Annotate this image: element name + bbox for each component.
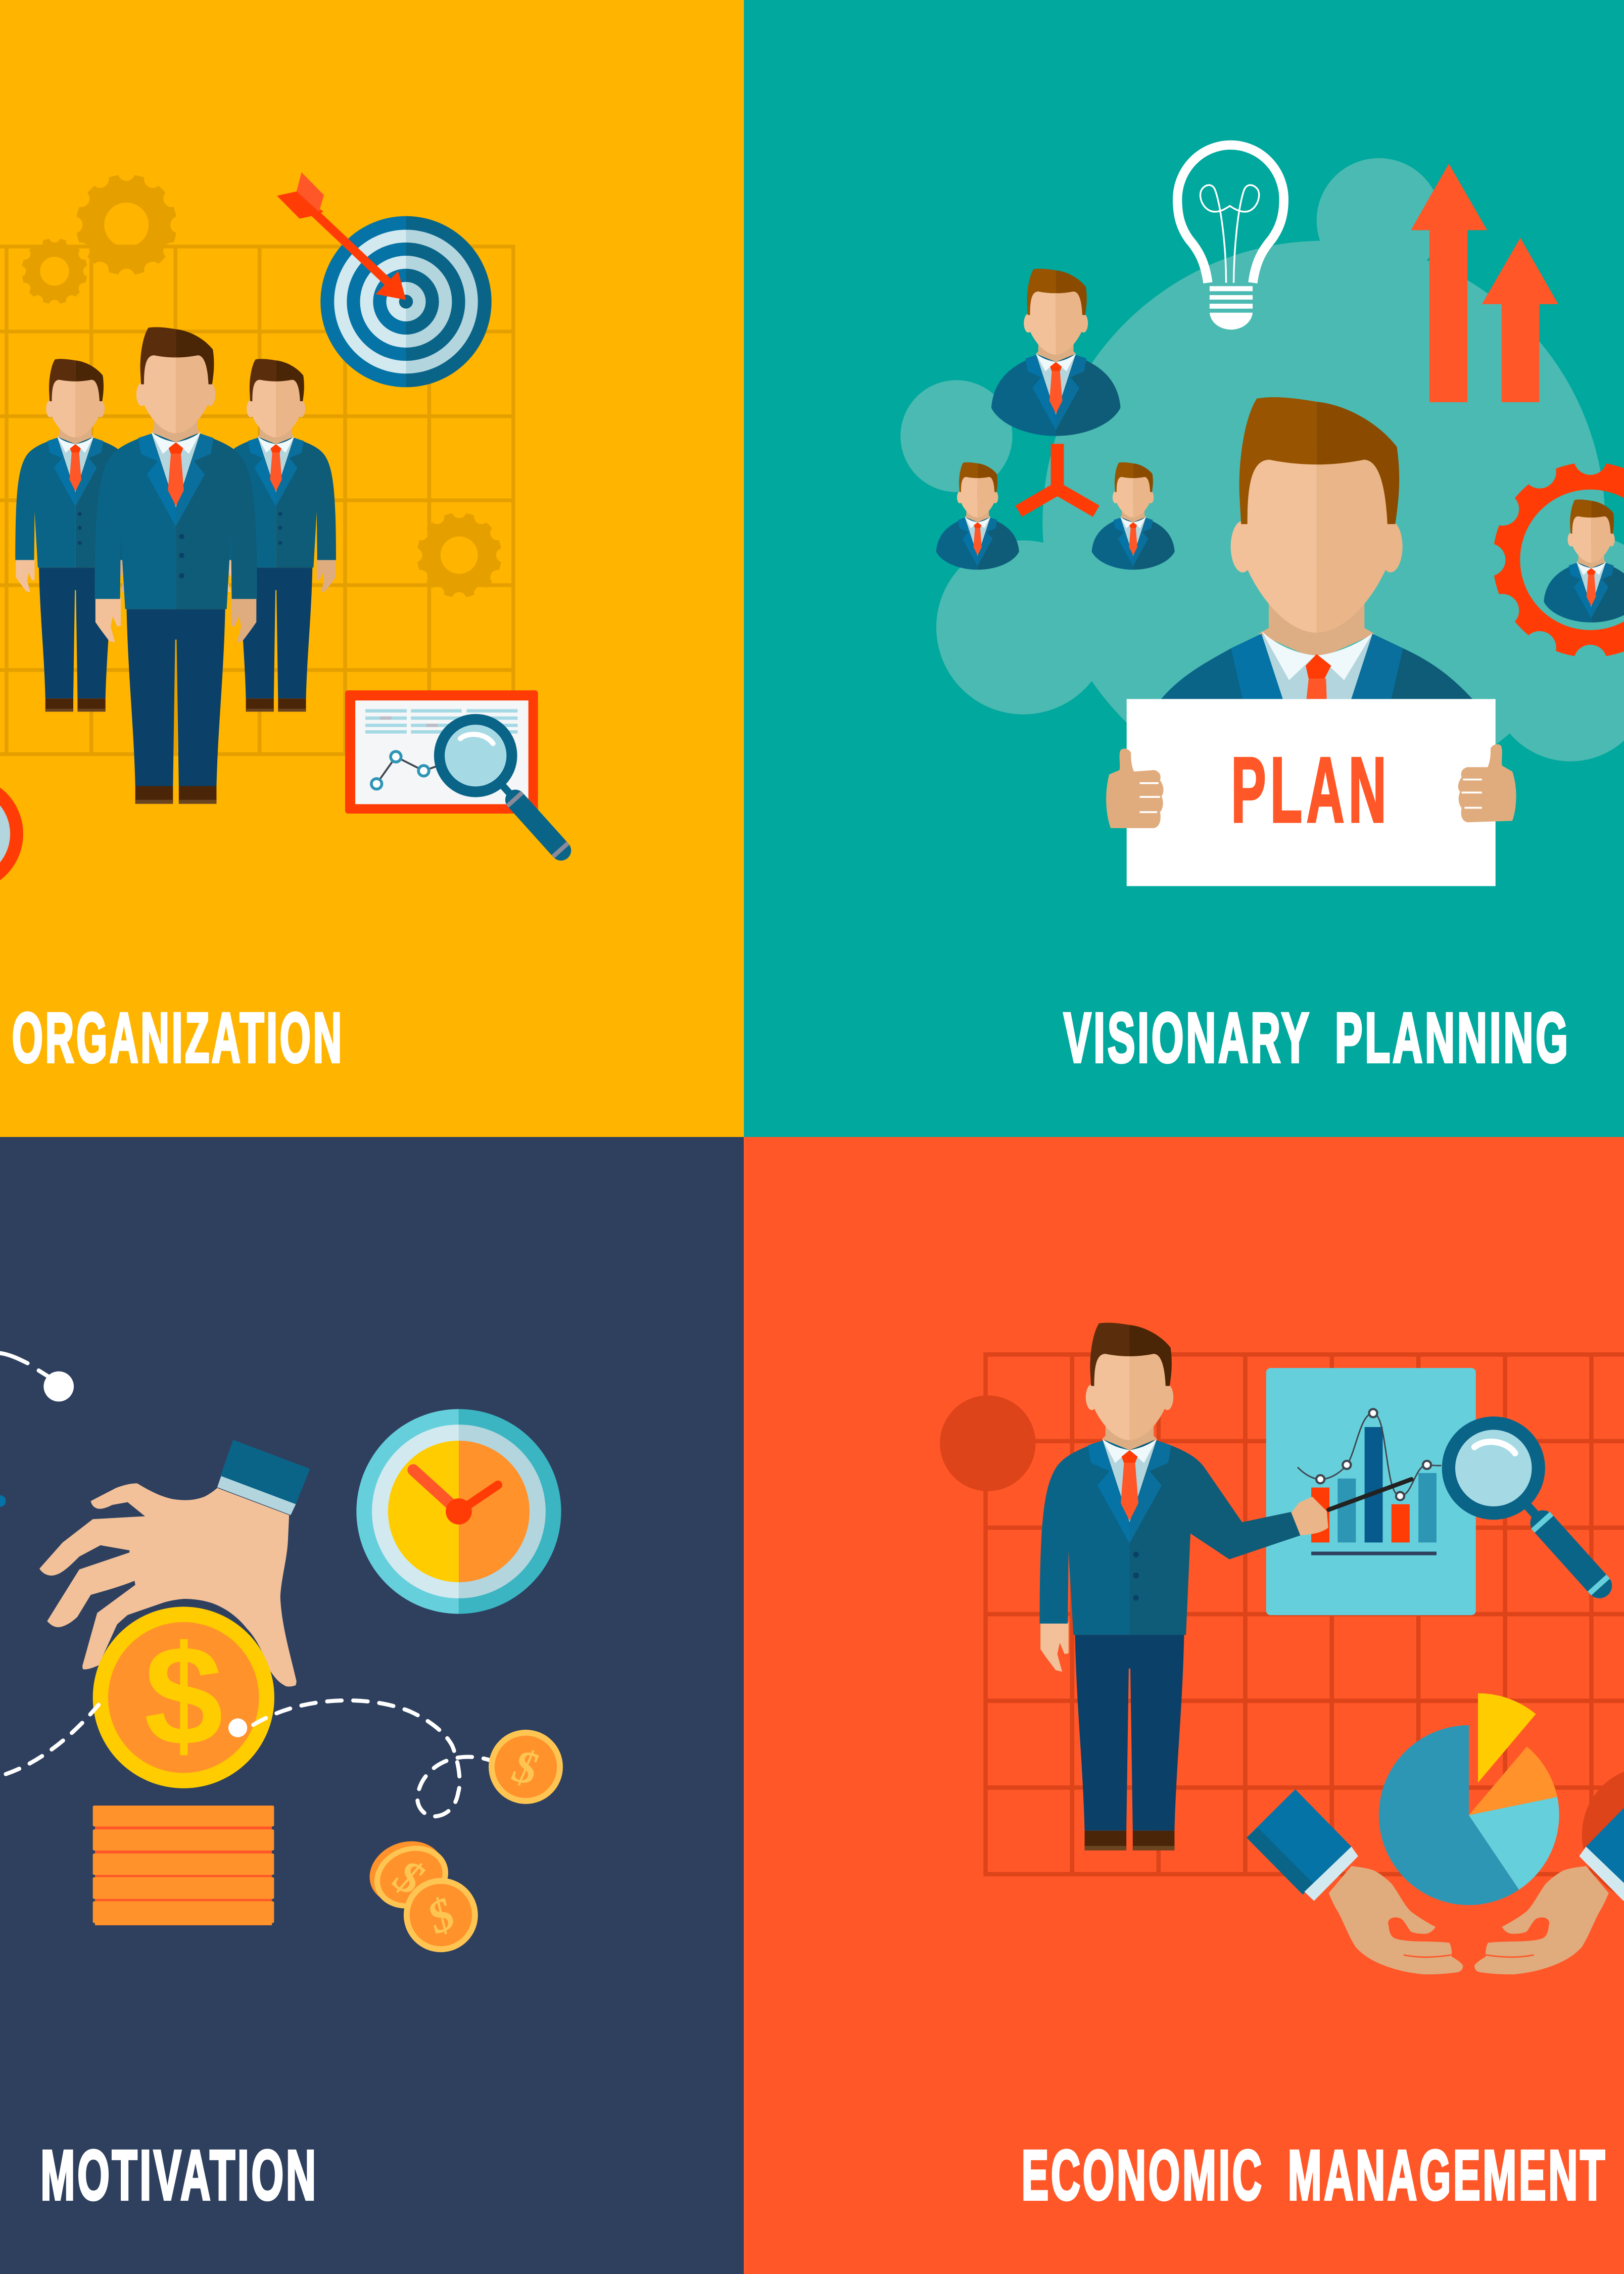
icon: light bulb <box>1177 145 1284 329</box>
background grid <box>985 1354 1624 1874</box>
icon: small coin right: $ <box>508 1739 542 1795</box>
figure: left bust <box>936 462 1019 570</box>
icon: magnifier <box>1442 1416 1617 1603</box>
panel: economic management <box>744 1137 1624 2274</box>
panel: organization <box>0 0 744 1137</box>
heading: motivation: MOTIVATION <box>40 2136 318 2214</box>
figure: left team member <box>15 359 135 712</box>
figure: central manager <box>94 327 257 804</box>
arrow: into target <box>277 172 406 300</box>
icon: clock <box>356 1409 561 1614</box>
icon: cuff <box>217 1440 310 1515</box>
dark circle at right edge <box>1582 1767 1624 1903</box>
icon: cropped ring at left edge <box>0 776 23 892</box>
icon: small coin front <box>404 1878 478 1952</box>
icon: tilted coin behind <box>361 1830 457 1920</box>
background grid <box>0 247 513 754</box>
icon: report with chart <box>345 690 538 814</box>
icon: right hand with cuff <box>1474 1789 1624 1974</box>
cloud background <box>900 158 1624 803</box>
figure: right bust <box>1092 462 1175 570</box>
line chart <box>1298 1409 1441 1500</box>
icon: large gear <box>76 174 177 275</box>
heading: organization: ORGANIZATION <box>12 999 344 1077</box>
ball on coin <box>228 1719 247 1737</box>
icon: hierarchy connector <box>1019 444 1096 511</box>
sign: plan: PLAN <box>1231 738 1391 841</box>
chart: coin stack <box>93 1806 274 1925</box>
dashed path: coin to small coin <box>253 1700 499 1817</box>
icon: tilted coin behind: $ <box>386 1849 432 1905</box>
icon: left hand <box>1106 748 1164 828</box>
arrow: short up <box>1482 238 1558 402</box>
icon: magnifier <box>434 714 576 865</box>
bar chart <box>1311 1427 1437 1555</box>
panel: visionary planning <box>744 0 1624 1137</box>
icon: red gear with person <box>1493 462 1624 657</box>
figure: right team member <box>216 359 336 712</box>
icon: hand <box>39 1483 297 1687</box>
arrow: tall up <box>1411 164 1487 402</box>
icon: small gear <box>22 239 87 304</box>
sign: plan <box>1127 699 1496 886</box>
decorative circle <box>940 1395 1035 1491</box>
icon: right hand <box>1458 744 1516 822</box>
icon: target <box>320 216 492 387</box>
dashed path: top-left with ball <box>0 1353 74 1401</box>
pointer <box>1328 1479 1411 1510</box>
icon: large dollar coin <box>93 1607 274 1788</box>
small dot at left edge <box>0 1495 6 1507</box>
chart: pie <box>1379 1693 1559 1905</box>
figure: top bust <box>991 269 1121 436</box>
panel: chart board <box>1266 1368 1476 1615</box>
icon: left hand with cuff <box>1247 1789 1463 1974</box>
icon: large dollar coin: $ <box>144 1616 223 1775</box>
figure: planner holding sign <box>1161 397 1472 699</box>
panel: motivation <box>0 1137 744 2274</box>
icon: small coin right <box>489 1730 563 1804</box>
icon: right gear <box>417 513 502 598</box>
dashed path: left to coin <box>6 1705 99 1774</box>
icon: small coin front: $ <box>419 1887 462 1944</box>
figure: presenter <box>1040 1322 1328 1851</box>
